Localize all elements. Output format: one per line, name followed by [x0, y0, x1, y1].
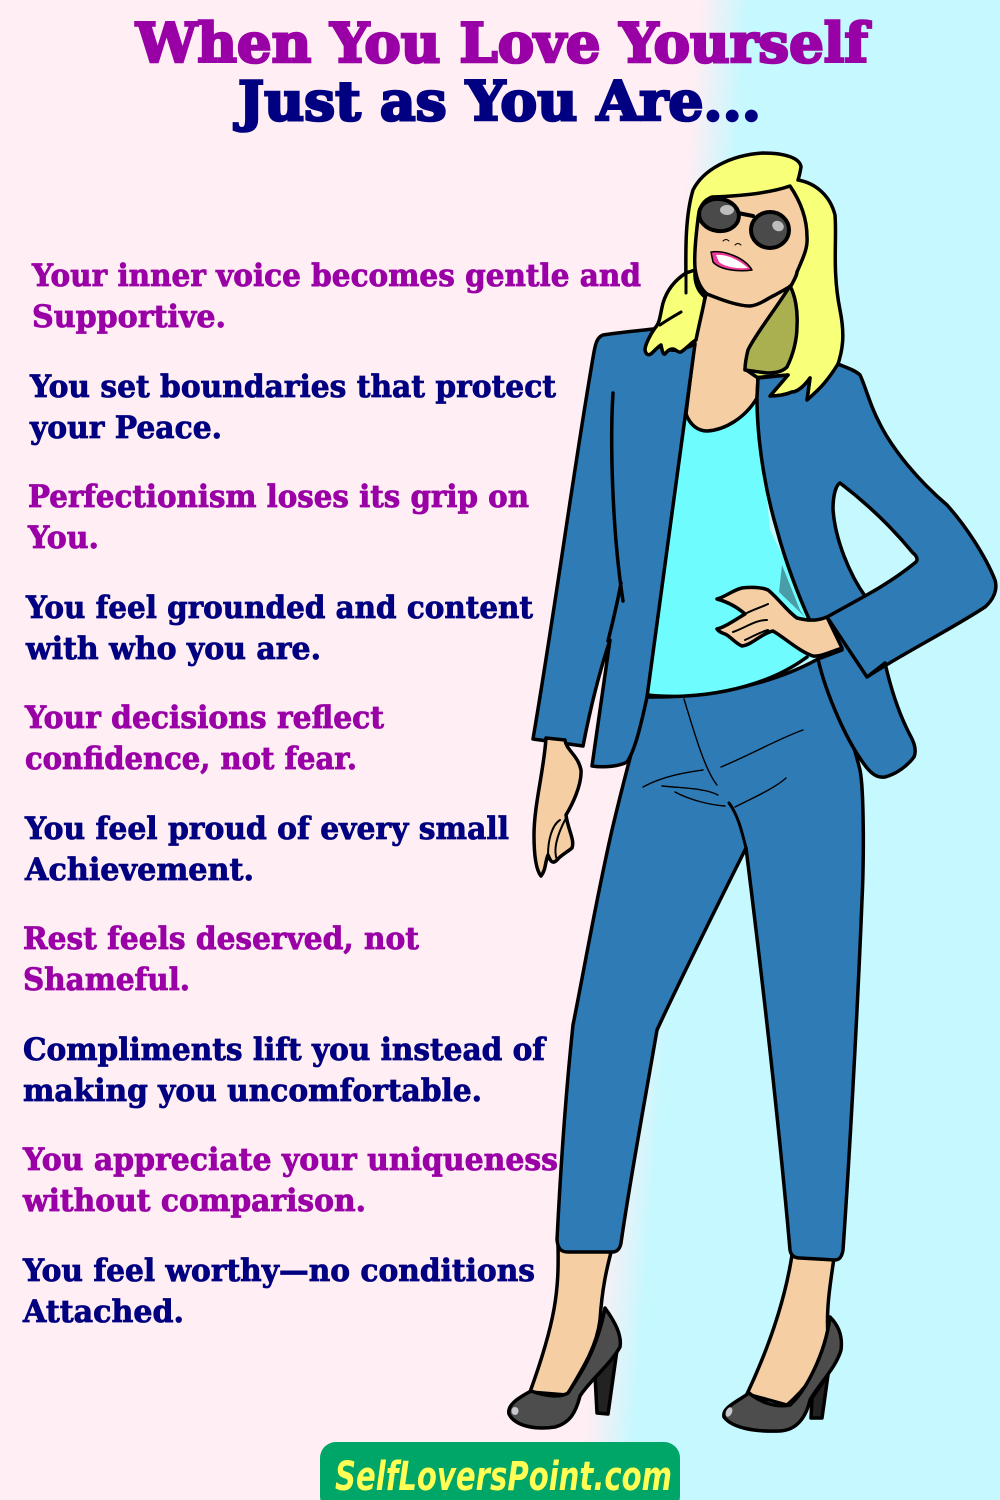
hanging hand	[534, 738, 581, 876]
left hand	[534, 738, 581, 876]
statement 8: making you uncomfortable.	[23, 1073, 482, 1109]
statement 4: with who you are.	[25, 631, 321, 667]
statement 10: You feel worthy—no conditions	[22, 1253, 535, 1289]
statement 2: your Peace.	[29, 410, 222, 446]
jacket left sleeve and panel	[533, 329, 695, 767]
hand and wrist	[717, 587, 842, 656]
bridge	[738, 213, 753, 216]
shirt	[648, 390, 815, 696]
statement 5: Your decisions reflect	[24, 700, 385, 736]
statement 6: You feel proud of every small	[24, 811, 509, 847]
statement 3: You.	[27, 520, 99, 556]
illustration: woman in blue suit	[509, 153, 996, 1431]
jacket right body	[757, 364, 996, 777]
left leg	[530, 1245, 613, 1395]
left lens	[697, 196, 741, 234]
crease left	[643, 770, 703, 787]
title line 1: When You Love Yourself	[135, 11, 872, 75]
fingers	[733, 604, 768, 640]
crease	[735, 778, 786, 807]
statement 4: You feel grounded and content	[25, 590, 534, 626]
face	[695, 186, 807, 306]
fly seam	[684, 699, 717, 785]
statement 1: Your inner voice becomes gentle and	[31, 258, 641, 294]
right lens highlight	[770, 219, 786, 233]
right lens	[751, 212, 789, 248]
shirt shadow	[779, 565, 805, 617]
title	[135, 11, 872, 133]
jacket left sleeve seam	[612, 393, 623, 601]
statement 7: Rest feels deserved, not	[23, 921, 420, 957]
title line 2: Just as You Are...	[234, 69, 761, 133]
olive scarf shadow	[745, 286, 797, 373]
left toe highlight	[512, 1407, 518, 1415]
teeth	[716, 255, 748, 268]
website name: SelfLoversPoint.com	[335, 1454, 672, 1500]
right shoe	[724, 1317, 841, 1431]
hand on hip	[717, 587, 842, 656]
hair lock strand	[660, 250, 686, 325]
hair front lock	[645, 270, 705, 355]
right toe highlight	[724, 1406, 734, 1418]
right shoe heel	[811, 1375, 828, 1418]
jacket left fold	[608, 583, 621, 641]
statement 6: Achievement.	[24, 852, 254, 888]
statement 1: Supportive.	[32, 299, 226, 335]
list of statements	[22, 258, 641, 1330]
statement 3: Perfectionism loses its grip on	[28, 479, 529, 515]
statement 2: You set boundaries that protect	[29, 369, 557, 405]
statement 9: You appreciate your uniqueness	[22, 1142, 558, 1178]
statement 5: confidence, not fear.	[25, 741, 357, 777]
inner leg line	[729, 803, 746, 848]
statement 7: Shameful.	[23, 962, 190, 998]
pants	[557, 659, 863, 1260]
pants creases	[643, 699, 803, 848]
left shoe heel	[595, 1350, 617, 1414]
hair back	[686, 153, 843, 400]
right leg	[747, 1255, 834, 1405]
badge background	[320, 1442, 680, 1500]
statement 10: Attached.	[22, 1294, 184, 1330]
left hand fingers	[548, 818, 566, 860]
nose	[723, 240, 741, 245]
statement 8: Compliments lift you instead of	[23, 1032, 547, 1068]
left lens highlight	[720, 205, 734, 215]
neck	[686, 286, 790, 431]
sunglasses	[697, 196, 789, 248]
crease lower	[675, 792, 725, 806]
website badge	[320, 1442, 680, 1500]
crease right	[721, 730, 803, 767]
mouth	[711, 252, 752, 271]
shirt hem	[648, 657, 807, 696]
statement 9: without comparison.	[22, 1183, 366, 1219]
left shoe	[509, 1308, 620, 1428]
crease low	[662, 786, 718, 795]
